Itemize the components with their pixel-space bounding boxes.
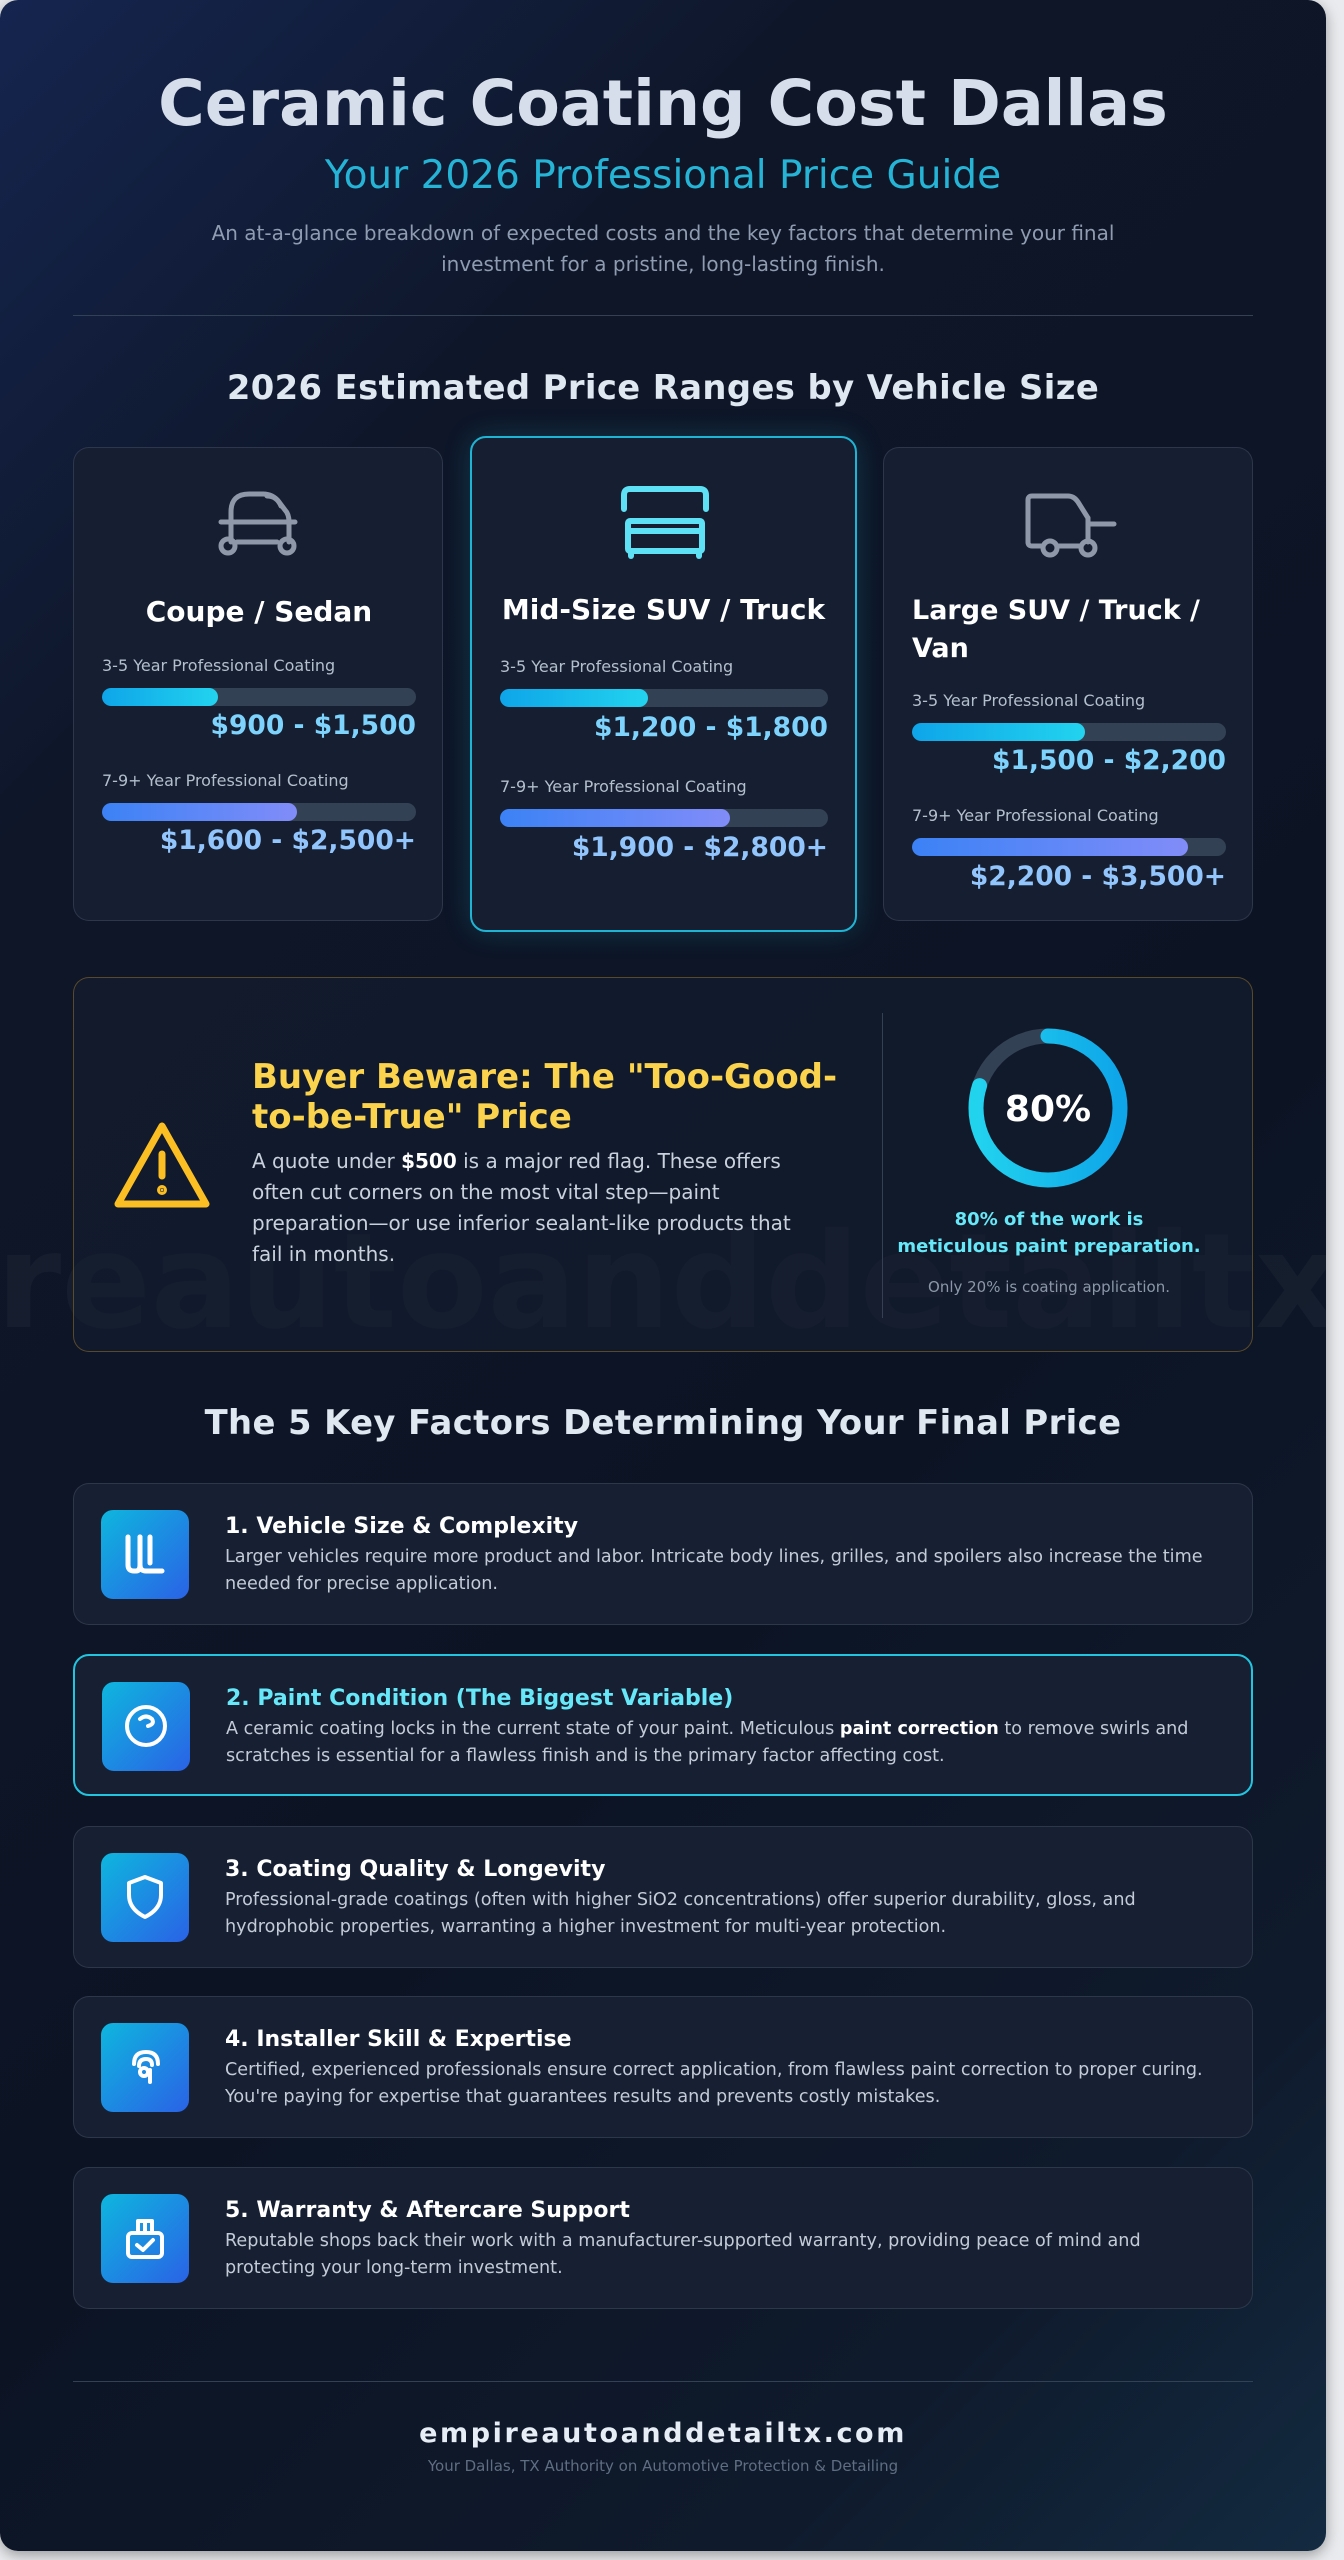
card: large suv: 3-5 Year Professional Coating bbox=[912, 691, 1145, 710]
factor 3: 3. Coating Quality & Longevity bbox=[225, 1857, 605, 1882]
factor 4: Certified, experienced professionals ensure correct application, from flawless paint correction to proper curing. You're paying for expertise that guarantees results and prevents costly mistakes. bbox=[225, 2060, 1203, 2107]
card: mid-size suv (featured) bbox=[470, 436, 857, 932]
card: large suv bbox=[883, 447, 1253, 921]
card: coupe sedan: 3-5 Year Professional Coating bbox=[102, 656, 335, 675]
donut caption: meticulous paint preparation. bbox=[897, 1236, 1201, 1257]
factor 1 bbox=[73, 1483, 1253, 1625]
icon: sedan bbox=[218, 492, 298, 556]
factor 2 (highlighted): A ceramic coating locks in the current state of your paint. Meticulous paint correction to remove swirls and scratches is essential for a flawless finish and is the primary factor affecting cost. bbox=[226, 1719, 1188, 1766]
donut chart 80%: 80% bbox=[1005, 1089, 1091, 1130]
heading: Buyer Beware: The "Too-Good-to-be-True" Price bbox=[252, 1057, 837, 1137]
donut caption bbox=[897, 1209, 1201, 1257]
icon: van bbox=[1026, 494, 1116, 558]
heading: price ranges: 2026 Estimated Price Ranges by Vehicle Size bbox=[227, 368, 1099, 407]
small note: Only 20% is coating application. bbox=[928, 1278, 1170, 1296]
card: large suv: 7-9+ Year Professional Coating bbox=[912, 806, 1159, 825]
footer tagline: Your Dallas, TX Authority on Automotive Protection & Detailing bbox=[428, 2457, 898, 2475]
footer domain: empireautoanddetailtx.com bbox=[419, 2418, 907, 2449]
icon: paint bbox=[102, 1682, 190, 1771]
icon: shield bbox=[101, 1853, 189, 1942]
price: $1,500 - $2,200 bbox=[992, 745, 1226, 776]
factor 4: 4. Installer Skill & Expertise bbox=[225, 2027, 572, 2052]
factor 3 bbox=[73, 1826, 1253, 1968]
card: coupe sedan bbox=[73, 447, 443, 921]
donut chart 80% bbox=[968, 1028, 1128, 1188]
factor 3: Professional-grade coatings (often with higher SiO2 concentrations) offer superior durability, gloss, and hydrophobic properties, warranting a higher investment for multi-year protection. bbox=[225, 1890, 1136, 1937]
card title: Coupe / Sedan bbox=[146, 595, 372, 628]
icon: suv bbox=[621, 486, 709, 559]
factor 5 bbox=[73, 2167, 1253, 2309]
price: $1,900 - $2,800+ bbox=[572, 832, 828, 863]
price: $2,200 - $3,500+ bbox=[970, 861, 1226, 892]
intro text: An at-a-glance breakdown of expected costs and the key factors that determine your final investment for a pristine, long-lasting finish. bbox=[212, 221, 1114, 276]
factor 2 (highlighted) bbox=[73, 1654, 1253, 1796]
icon: size bbox=[101, 1510, 189, 1599]
heading: key factors: The 5 Key Factors Determining Your Final Price bbox=[205, 1403, 1121, 1442]
factor 4 bbox=[73, 1996, 1253, 2138]
card: coupe sedan: 7-9+ Year Professional Coating bbox=[102, 771, 349, 790]
body text: A quote under $500 is a major red flag. These offers often cut corners on the most vital step—paint preparation—or use inferior sealant-like products that fail in months. bbox=[252, 1149, 791, 1266]
icon: warning bbox=[114, 1122, 210, 1208]
icon: warranty bbox=[101, 2194, 189, 2283]
factor 5: Reputable shops back their work with a manufacturer-supported warranty, providing peace of mind and protecting your long-term investment. bbox=[225, 2231, 1141, 2278]
price: $900 - $1,500 bbox=[211, 710, 416, 741]
factor 2 (highlighted): 2. Paint Condition (The Biggest Variable) bbox=[226, 1686, 733, 1711]
donut caption: 80% of the work is bbox=[955, 1209, 1143, 1230]
card title: Mid-Size SUV / Truck bbox=[502, 593, 825, 626]
subtitle: Your 2026 Professional Price Guide bbox=[325, 153, 1001, 198]
price: $1,200 - $1,800 bbox=[594, 712, 828, 743]
factor 1: Larger vehicles require more product and labor. Intricate body lines, grilles, and spoilers also increase the time needed for precise application. bbox=[225, 1547, 1203, 1594]
title: Ceramic Coating Cost Dallas bbox=[158, 66, 1168, 140]
factor 5: 5. Warranty & Aftercare Support bbox=[225, 2198, 630, 2223]
price: $1,600 - $2,500+ bbox=[160, 825, 416, 856]
factor 1: 1. Vehicle Size & Complexity bbox=[225, 1514, 578, 1539]
card title: Large SUV / Truck / Van bbox=[912, 595, 1200, 664]
icon: skill bbox=[101, 2023, 189, 2112]
panel: buyer beware bbox=[73, 977, 1253, 1352]
card: mid-size suv (featured): 3-5 Year Professional Coating bbox=[500, 657, 733, 676]
card: mid-size suv (featured): 7-9+ Year Professional Coating bbox=[500, 777, 747, 796]
